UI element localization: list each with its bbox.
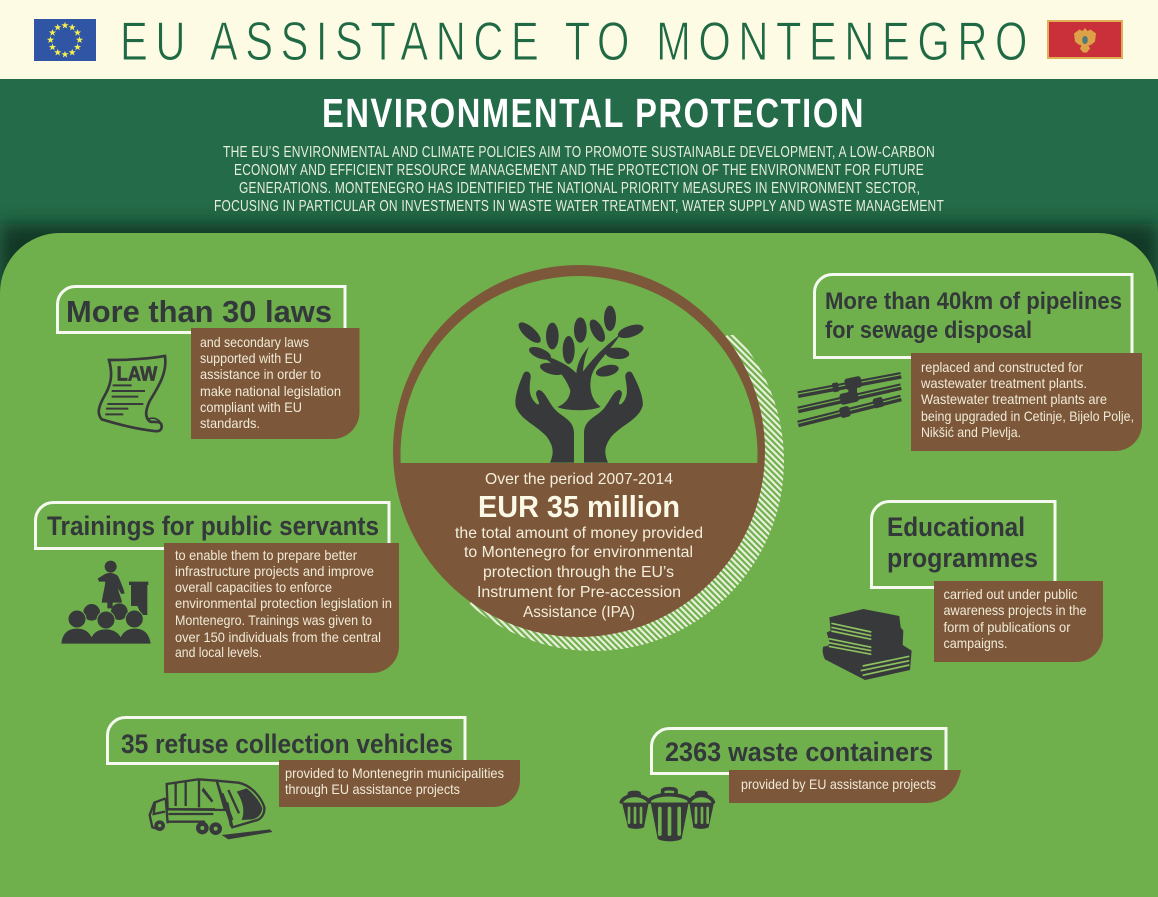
intro text block: FOCUSING IN PARTICULAR ON INVESTMENTS IN WASTE WATER TREATMENT, WATER SUPPLY AND WASTE MANAGEMENT — [214, 198, 944, 215]
description box — [729, 770, 961, 803]
description box: and secondary laws — [200, 334, 309, 350]
icon: law scroll: LAW — [117, 363, 158, 386]
panel shadow — [0, 224, 1158, 897]
description box — [191, 328, 360, 439]
panel: pipelines: More than 40km of pipelines — [825, 288, 1122, 315]
icon: EU flag — [34, 19, 96, 61]
description box — [164, 543, 399, 673]
panel: laws: More than 30 laws — [66, 294, 332, 329]
intro text block: THE EU’S ENVIRONMENTAL AND CLIMATE POLICIES AIM TO PROMOTE SUSTAINABLE DEVELOPMENT, A LOW-CARBON — [223, 144, 935, 161]
description box — [911, 353, 1142, 451]
description box: assistance in order to — [200, 366, 321, 382]
description box: through EU assistance projects — [285, 781, 460, 797]
description box: infrastructure projects and improve — [175, 563, 374, 579]
circle text: protection through the EU’s — [483, 564, 674, 581]
icon: garbage truck — [150, 779, 272, 839]
panel: laws — [58, 286, 360, 439]
header band — [0, 0, 1158, 79]
description box: replaced and constructed for — [921, 359, 1083, 375]
icon: teacher and audience — [61, 561, 151, 644]
description box: standards. — [200, 415, 260, 431]
circle text: Instrument for Pre-accession — [477, 584, 681, 601]
panel: trainings: Trainings for public servants — [47, 511, 379, 541]
panel: educational programmes: Educational — [887, 512, 1025, 542]
description box: awareness projects in the — [944, 602, 1087, 618]
heading: Environmental Protection: ENVIRONMENTAL PROTECTION — [322, 90, 865, 136]
panel: educational programmes: programmes — [887, 543, 1038, 573]
description box: provided to Montenegrin municipalities — [285, 765, 504, 781]
description box: wastewater treatment plants. — [920, 375, 1087, 391]
circle text — [455, 471, 703, 621]
circle text: EUR 35 million — [478, 489, 680, 524]
intro text block: ECONOMY AND EFFICIENT RESOURCE MANAGEMENT AND THE PROTECTION OF THE ENVIRONMENT FOR FUTURE — [234, 162, 924, 179]
panel: pipelines: for sewage disposal — [825, 317, 1032, 344]
brown ring — [393, 265, 765, 637]
circle text: Assistance (IPA) — [523, 604, 635, 621]
description box: Nikšić and Plevlja. — [921, 424, 1021, 440]
panel: refuse collection vehicles: 35 refuse collection vehicles — [121, 729, 453, 759]
description box: make national legislation — [200, 383, 341, 399]
description box: Wastewater treatment plants are — [921, 391, 1107, 407]
green circle interior — [401, 276, 758, 463]
circle text: to Montenegro for environmental — [464, 544, 693, 561]
icon: waste bins — [621, 789, 714, 842]
description box: campaigns. — [944, 635, 1008, 651]
description box: compliant with EU — [200, 399, 302, 415]
panel: pipelines — [798, 274, 1142, 451]
description box: overall capacities to enforce — [175, 579, 332, 595]
icon: law scroll — [99, 356, 165, 431]
description box: and local levels. — [175, 644, 262, 660]
description box: environmental protection legislation in — [175, 595, 392, 611]
icon: books — [823, 609, 912, 680]
intro text block — [214, 144, 944, 215]
circle text: Over the period 2007-2014 — [485, 471, 673, 488]
description box: supported with EU — [200, 350, 302, 366]
central circle — [393, 265, 784, 651]
circle text: the total amount of money provided — [455, 525, 703, 542]
main green panel — [0, 233, 1158, 897]
description box: carried out under public — [944, 586, 1078, 602]
hatched circle shadow — [470, 335, 784, 651]
icon: pipes — [798, 375, 901, 424]
description box: being upgraded in Cetinje, Bijelo Polje, — [921, 408, 1134, 424]
intro text block: GENERATIONS. MONTENEGRO HAS IDENTIFIED THE NATIONAL PRIORITY MEASURES IN ENVIRONMENT SECTOR, — [239, 180, 920, 197]
description box — [279, 760, 520, 807]
panel: waste containers — [621, 728, 961, 842]
description box: provided by EU assistance projects — [741, 776, 936, 792]
description box: to enable them to prepare better — [175, 547, 357, 563]
description box — [934, 581, 1103, 662]
panel: trainings — [36, 502, 399, 673]
panel: educational programmes — [823, 502, 1103, 680]
panel: refuse collection vehicles — [108, 717, 520, 839]
icon: Montenegro flag — [1047, 20, 1123, 59]
icon: hands holding tree — [515, 306, 645, 463]
description box: form of publications or — [944, 619, 1071, 635]
panel: waste containers: 2363 waste containers — [665, 737, 933, 767]
description box: over 150 individuals from the central — [175, 629, 381, 645]
description box: Montenegro. Trainings was given to — [175, 612, 372, 628]
